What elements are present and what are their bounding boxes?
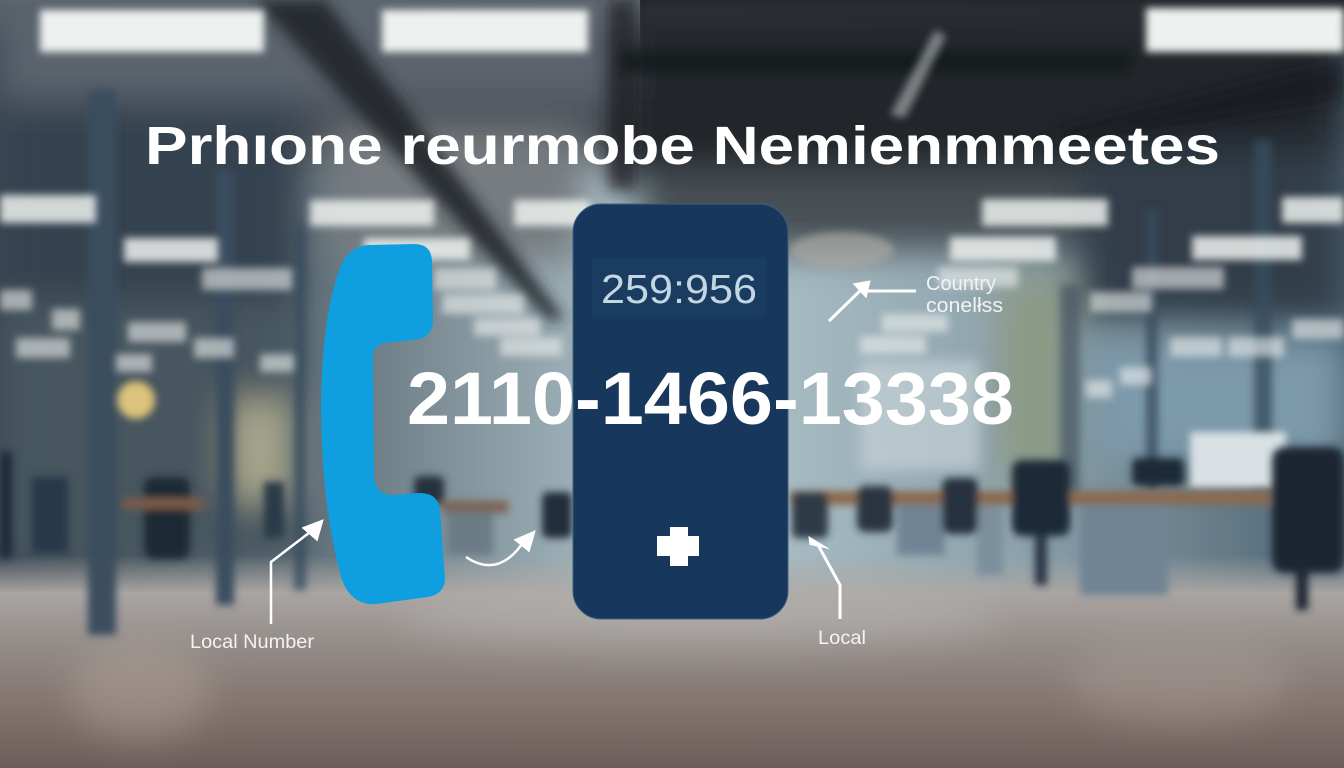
glass wall columns: [88, 90, 1272, 635]
whiteboard / windows: [1190, 432, 1286, 488]
floor: [0, 555, 1344, 768]
ceiling disc: [790, 232, 894, 268]
arrow: local: [809, 537, 840, 619]
phone display: [592, 258, 766, 316]
phone number: 2110-1466-13338: [407, 357, 1014, 440]
icon: blue telephone handset: [321, 244, 445, 604]
label: country: [926, 273, 1003, 317]
ceiling structure: [255, 0, 565, 320]
icon: plus: [657, 527, 699, 566]
ceiling lights: [0, 8, 1344, 398]
label: country: conelłss: [926, 295, 1003, 317]
arrow: local number: [271, 520, 323, 624]
desks and chairs: [0, 447, 1344, 610]
label: country: Country: [926, 273, 996, 295]
wall lamp: [117, 381, 155, 419]
panel: dark blue phone: [573, 204, 788, 619]
display time text: 259:956: [601, 266, 757, 312]
title: Prhıone reurmobe Nemienmmeetes: [145, 116, 1220, 176]
label: local number: Local Number: [190, 632, 315, 653]
label: local: Local: [818, 628, 866, 649]
arrow: to country label: [829, 281, 916, 321]
arrow: curved centre: [466, 531, 535, 565]
